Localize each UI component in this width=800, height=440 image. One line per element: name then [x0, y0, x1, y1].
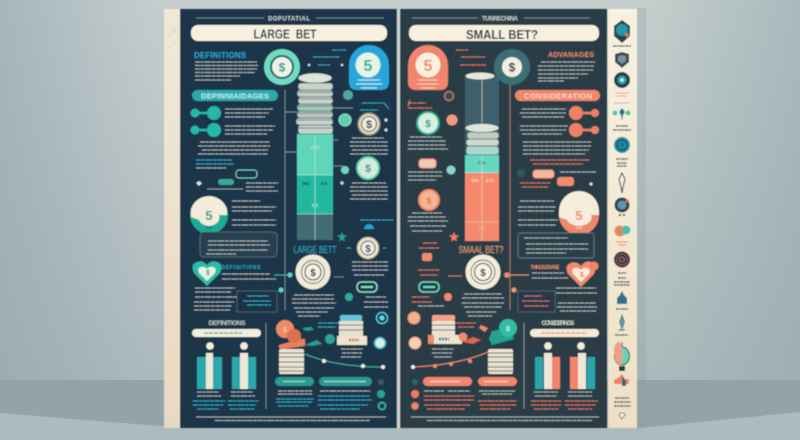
small grey caption — [614, 102, 630, 104]
text under coin — [462, 294, 504, 316]
icon: shield — [615, 52, 629, 68]
text with pills — [517, 160, 596, 187]
heading: definitions: DEFINITIONS — [194, 51, 246, 60]
connector ticks — [285, 108, 353, 166]
right cream side strip with icons — [608, 9, 637, 428]
icon: five dial: 5 — [205, 208, 213, 223]
badge: blue five: 5 — [364, 58, 373, 75]
text block with pills — [196, 160, 278, 191]
title: small bet: SMALL BET? — [466, 28, 538, 42]
icon: star and coins — [337, 220, 393, 259]
vertical connector — [284, 90, 286, 310]
pill: consideration: CONSIDERATION — [524, 92, 592, 101]
bar chart: left group — [197, 342, 256, 389]
title: large bet: LARGE BET — [254, 28, 317, 42]
note box — [200, 232, 277, 257]
icon: five dial: 016 — [206, 225, 213, 230]
icon: spiral — [614, 252, 630, 285]
vertical connector — [509, 85, 511, 310]
chart: column with small stack: 0.11 — [478, 160, 487, 165]
trend line with dots — [302, 323, 385, 369]
bar chart captions — [197, 392, 255, 396]
trend line with dots — [411, 323, 488, 369]
heading with connector dot — [504, 265, 568, 292]
footer lines — [411, 416, 599, 418]
right column: coins and notes: $ — [365, 163, 371, 175]
pill: teal heading — [192, 90, 278, 101]
coin stack: orange coin — [276, 320, 305, 374]
icon: heart: $ — [206, 270, 210, 277]
panel: small bet — [400, 9, 607, 428]
coin stack: teal coin — [488, 319, 517, 374]
section heading with pill: CONSIDERINGS — [542, 320, 575, 327]
section heading with pill — [192, 320, 261, 337]
icon: five dial: 5 — [575, 208, 583, 223]
chart: tall column with coin stack: GAS — [310, 145, 320, 150]
heading with connector dot — [222, 265, 292, 279]
label: small bet: SMAAL BET? — [458, 245, 504, 256]
text under coin — [292, 295, 336, 316]
coin stack: teal coin: $ — [506, 326, 510, 333]
heading: advantages: ADVANAGES — [548, 52, 594, 59]
coin stack with label card — [408, 312, 481, 357]
text and bordered note — [518, 288, 597, 312]
pill: teal heading: DEPINNIAIDAGES — [201, 92, 269, 101]
icon: big coin — [448, 254, 500, 290]
panel: large bet — [180, 9, 400, 428]
icon: star — [449, 232, 459, 242]
bar chart captions — [534, 392, 592, 396]
icon: heart — [567, 262, 598, 287]
bar chart: right group — [535, 342, 595, 389]
top callout text — [456, 50, 486, 65]
captions under pills — [424, 391, 515, 394]
section heading with pill: DEFINITIONS — [208, 320, 246, 327]
chart: tall column with coin stack: 061 — [302, 181, 310, 186]
note box — [518, 233, 594, 258]
icon: coins — [614, 226, 630, 245]
heading with connector dot: DEFINITIONS — [222, 265, 261, 271]
title: large bet — [191, 25, 387, 42]
icon: ring coin — [264, 49, 300, 85]
icon: gear — [614, 72, 630, 88]
chart: column with small stack: 0.5 — [479, 226, 486, 231]
icon: teal trio — [612, 108, 631, 130]
chart: column with small stack — [465, 72, 499, 241]
icon: heart — [193, 261, 221, 286]
icon: five dial — [190, 196, 276, 234]
left cream side strip — [164, 9, 180, 428]
icon: ring coin — [494, 49, 530, 85]
heading with connector dot: THINGS DRANE — [530, 265, 560, 271]
icon: big coin — [296, 254, 344, 290]
icon: balloon — [614, 342, 630, 371]
top callout text — [308, 50, 346, 66]
right column: coins and notes: $ — [366, 119, 372, 131]
chart: column with small stack: 060 — [471, 178, 479, 183]
icon: target — [614, 137, 630, 166]
icon: diamond — [615, 315, 628, 335]
icon: emblem one — [613, 20, 631, 46]
text block: definitions — [195, 62, 258, 80]
icon: big coin: $ — [310, 268, 316, 279]
icon rows with text — [190, 106, 275, 137]
section heading with pill — [530, 320, 599, 337]
text block: middle — [523, 142, 591, 154]
badge: orange five — [408, 45, 448, 90]
text block: advantages — [538, 62, 595, 81]
right notes lower — [345, 262, 388, 348]
left column: coins and notes: $ — [425, 119, 431, 130]
coin stack: orange coin: $ — [283, 327, 287, 334]
icon: pen nib — [619, 173, 625, 193]
top label: TUNRECHINA — [482, 16, 519, 22]
chart: tall column with coin stack — [296, 73, 333, 240]
badge: orange five: 5 — [424, 58, 433, 75]
icon: five dial — [518, 191, 599, 235]
icon: cluster — [614, 374, 631, 406]
captions under pills — [278, 391, 370, 394]
text block: middle — [198, 142, 270, 154]
chart: column with small stack: 0.11 — [486, 178, 495, 183]
title: small bet — [409, 25, 599, 42]
icon: five dial: 030 — [576, 225, 583, 230]
badge: blue five — [349, 45, 389, 90]
label: large bet: LARGE BETT — [294, 245, 336, 256]
pills — [275, 377, 386, 410]
icon rows with text — [520, 106, 599, 137]
footer lines — [196, 416, 386, 418]
small orange caption — [615, 93, 629, 96]
icon: heart: $ — [580, 272, 584, 279]
pill: consideration — [515, 90, 600, 101]
top label: DOPUTATIAL — [268, 16, 310, 22]
left column: coins and notes — [408, 92, 458, 231]
icon: star and coins: $ — [365, 244, 371, 255]
icon: big coin: $ — [480, 268, 486, 279]
icon: badge — [614, 198, 630, 215]
icon: bell — [616, 291, 628, 309]
text and bordered note — [194, 288, 284, 312]
chart: tall column with coin stack: 0.5 — [312, 203, 319, 208]
icon: small gem — [619, 413, 625, 419]
left column: coins and notes: $ — [426, 196, 432, 206]
coin stack with label card — [337, 315, 367, 357]
left notes lower — [412, 243, 452, 306]
icon: ring coin: $ — [509, 60, 516, 74]
icon: ring coin: $ — [279, 60, 286, 74]
pills — [411, 377, 517, 410]
right column: coins and notes — [339, 90, 389, 199]
chart: tall column with coin stack: 0.5 — [321, 181, 328, 186]
